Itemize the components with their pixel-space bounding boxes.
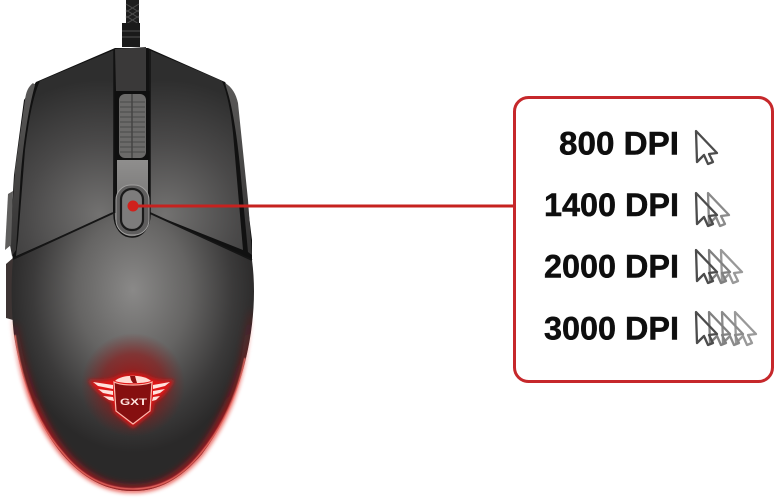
under-layer xyxy=(10,48,252,260)
row: 1400 DPI: 1400 DPI xyxy=(544,187,679,223)
DPI button xyxy=(116,185,149,235)
central strip xyxy=(114,47,150,237)
left wing xyxy=(93,382,114,401)
logo glow xyxy=(88,374,174,428)
scroll wheel xyxy=(119,94,146,158)
row: 2000 DPI: 2000 DPI xyxy=(544,248,679,284)
split lines xyxy=(13,213,252,260)
side button upper xyxy=(5,191,13,250)
icon: one cursor xyxy=(696,131,717,164)
left side panel xyxy=(10,83,35,256)
right wing xyxy=(152,382,170,401)
cable xyxy=(122,0,140,47)
panel: DPI options xyxy=(514,98,772,382)
right button xyxy=(149,50,243,250)
left button xyxy=(16,50,114,256)
row: 3000 DPI: 3000 DPI xyxy=(544,310,679,346)
bright edge line xyxy=(15,335,245,489)
icon: four cursors xyxy=(696,312,756,345)
row: 800 DPI: 800 DPI xyxy=(559,126,679,162)
icon: three cursors xyxy=(696,250,742,283)
side button lower xyxy=(6,258,13,320)
logo text: GXT xyxy=(120,397,147,408)
row: 1400 DPI xyxy=(544,187,729,226)
mouse illustration xyxy=(5,0,254,491)
row: 2000 DPI xyxy=(544,248,742,284)
connector line from DPI button to panel xyxy=(128,200,515,212)
lower body shell xyxy=(12,213,254,491)
logo: GXT shield xyxy=(88,374,174,428)
icon: two cursors xyxy=(696,193,729,226)
arch xyxy=(115,376,151,383)
shield xyxy=(114,382,152,424)
row: 800 DPI xyxy=(559,126,717,164)
red edge glow xyxy=(13,320,250,491)
body lighting xyxy=(13,310,253,491)
row: 3000 DPI xyxy=(544,310,756,346)
emblem mark xyxy=(130,376,137,383)
right side panel xyxy=(225,83,252,255)
